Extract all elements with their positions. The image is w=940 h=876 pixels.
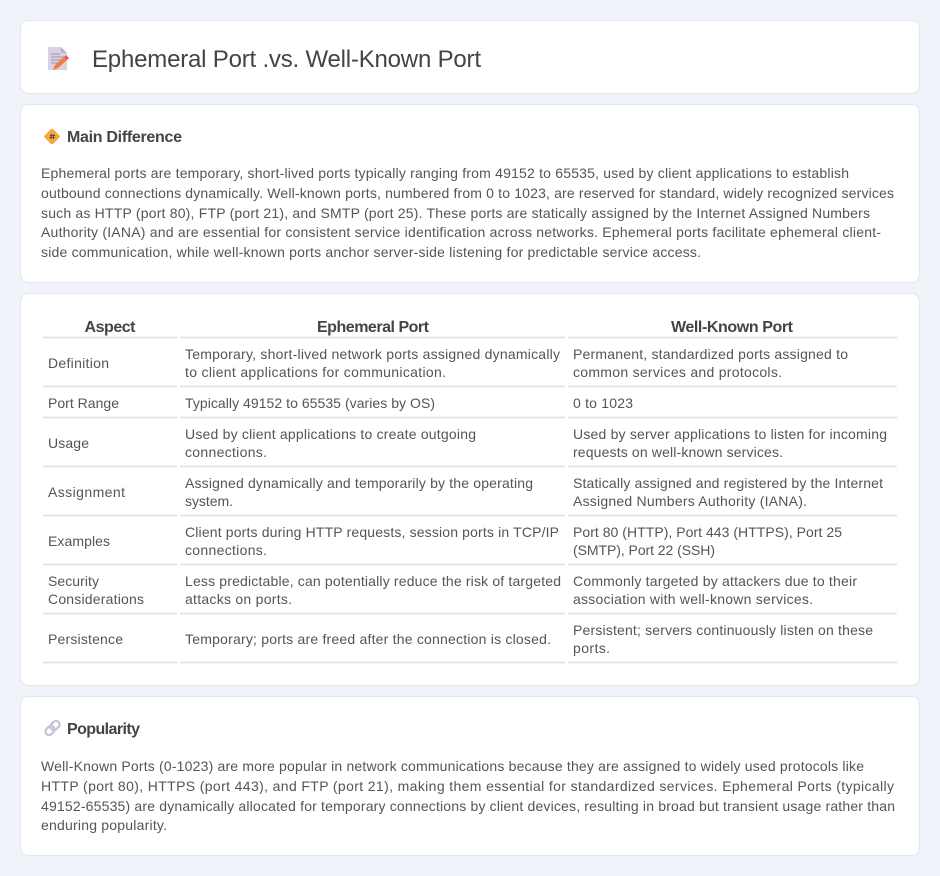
panel: title header (20, 20, 920, 94)
row: security considerations: Security (48, 573, 99, 589)
row: examples (48, 524, 842, 558)
row: usage: connections. (185, 444, 267, 460)
panel: comparison table (20, 294, 920, 686)
row: definition: Permanent, standardized ports assigned to (573, 346, 848, 362)
row: definition (48, 346, 848, 380)
row: usage: Used by server applications to listen for incoming (573, 426, 887, 442)
row: port range: Port Range (48, 395, 119, 411)
title: Ephemeral Port .vs. Well-Known Port (92, 46, 481, 73)
table header: Aspect (84, 319, 136, 336)
row: examples: (SMTP), Port 22 (SSH) (573, 542, 715, 558)
row: security considerations: Considerations (48, 591, 144, 607)
row: security considerations: Less predictable, can potentially reduce the risk of targeted (185, 573, 561, 589)
row: port range: Typically 49152 to 65535 (varies by OS) (185, 395, 435, 411)
text block: popularity paragraph: 49152-65535) are dynamically allocated for temporary connections by client devices, resulting in broad but transient usage rather than (41, 798, 895, 814)
text block: main difference paragraph: outbound connections dynamically. Well-known ports, numbered from 0 to 1023, are reserved for standard, widely recognized services (41, 185, 894, 201)
row: assignment (48, 475, 883, 509)
row: usage (48, 426, 887, 460)
row: definition: common services and protocols. (573, 364, 782, 380)
row: definition: Definition (48, 355, 109, 371)
table header (84, 319, 794, 336)
text block: popularity paragraph: Well-Known Ports (0-1023) are more popular in network communications because they are assigned to widely used protocols like (41, 758, 864, 774)
row: usage: Used by client applications to create outgoing (185, 426, 476, 442)
row: security considerations: association with well-known services. (573, 591, 813, 607)
icon: diamond sign (44, 128, 60, 145)
row: assignment: Statically assigned and registered by the Internet (573, 475, 883, 491)
text block: popularity paragraph: enduring popularity. (41, 817, 167, 833)
row: examples: connections. (185, 542, 267, 558)
text block: main difference paragraph: side communication, while well-known ports anchor server-side listening for predictable service access. (41, 244, 701, 260)
table header: Well-Known Port (671, 319, 794, 336)
text block: main difference paragraph: Authority (IANA) and are essential for consistent service identification across networks. Ephemeral ports facilitate ephemeral client- (41, 224, 881, 240)
row: definition: to client applications for communication. (185, 364, 446, 380)
row: persistence: Persistent; servers continuously listen on these (573, 622, 873, 638)
row: persistence: Persistence (48, 631, 123, 647)
row: port range (48, 395, 633, 411)
table header: Ephemeral Port (317, 319, 430, 336)
row: assignment: Assigned dynamically and temporarily by the operating (185, 475, 533, 491)
row: persistence: Temporary; ports are freed after the connection is closed. (185, 631, 551, 647)
row: usage: requests on well-known services. (573, 444, 783, 460)
row: assignment: Assignment (48, 484, 125, 500)
text block: popularity paragraph: HTTP (port 80), HTTPS (port 443), and FTP (port 21), making them essential for standardized services. Ephemeral Ports (typically (41, 778, 894, 794)
text block: popularity paragraph (41, 758, 895, 833)
text block: main difference paragraph: Ephemeral ports are temporary, short-lived ports typically ranging from 49152 to 65535, used by client applications to establish (41, 165, 849, 181)
panel: popularity (20, 696, 920, 856)
row: security considerations: attacks on ports. (185, 591, 292, 607)
row: definition: Temporary, short-lived network ports assigned dynamically (185, 346, 560, 362)
row: persistence: ports. (573, 640, 610, 656)
row: security considerations (48, 573, 857, 607)
row: examples: Client ports during HTTP requests, session ports in TCP/IP (185, 524, 559, 540)
row: usage: Usage (48, 435, 89, 451)
heading: main difference: Main Difference (67, 129, 182, 146)
icon: document with pencil (48, 47, 69, 70)
row: examples: Examples (48, 533, 110, 549)
text block: main difference paragraph: such as HTTP (port 80), FTP (port 21), and SMTP (port 25). These ports are statically assigned by the Internet Assigned Numbers (41, 205, 870, 221)
row: security considerations: Commonly targeted by attackers due to their (573, 573, 857, 589)
row: persistence (48, 622, 873, 656)
panel: main difference (20, 104, 920, 282)
heading: popularity: Popularity (67, 721, 140, 738)
text block: main difference paragraph (41, 165, 894, 260)
row: port range: 0 to 1023 (573, 395, 633, 411)
icon: chain link (44, 719, 61, 737)
row: assignment: Assigned Numbers Authority (IANA). (573, 493, 807, 509)
row: assignment: system. (185, 493, 233, 509)
row: examples: Port 80 (HTTP), Port 443 (HTTPS), Port 25 (573, 524, 842, 540)
